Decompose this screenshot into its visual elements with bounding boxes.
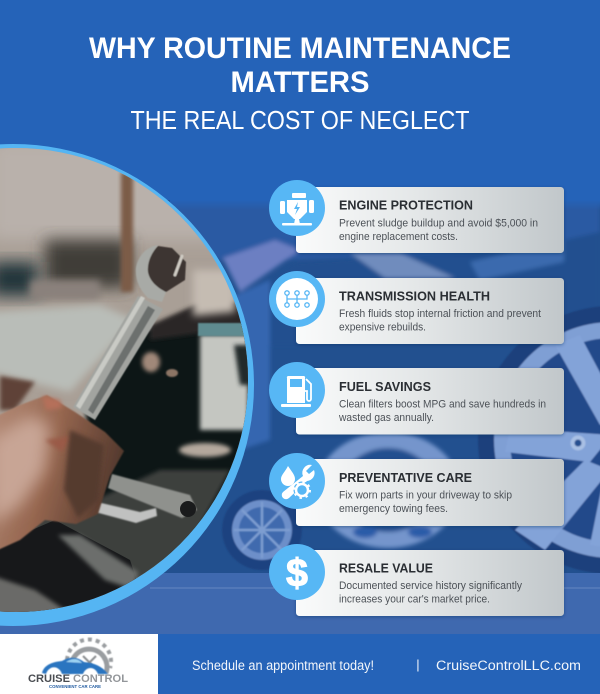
subtitle: THE REAL COST OF NEGLECT — [130, 105, 470, 135]
card: preventative care — [269, 453, 564, 526]
text: transmission health: Fresh fluids stop internal friction and prevent — [339, 308, 541, 320]
logo: car — [42, 658, 108, 674]
ground — [0, 573, 600, 634]
text: transmission health: expensive rebuilds. — [339, 322, 426, 334]
text: fuel savings: wasted gas annually. — [338, 412, 434, 424]
heading: preventative care: PREVENTATIVE CARE — [339, 470, 472, 485]
card: resale value — [269, 544, 564, 616]
text: preventative care: emergency towing fees. — [339, 503, 448, 515]
logo: gear — [67, 639, 111, 673]
wrench — [73, 245, 186, 420]
icon: dollar sign — [269, 544, 325, 600]
text: engine protection: engine replacement costs. — [339, 231, 458, 243]
text: resale value: Documented service history significantly — [339, 580, 522, 592]
text: engine protection — [339, 218, 538, 243]
footer: website: CruiseControlLLC.com — [436, 658, 581, 673]
icon: engine — [269, 180, 325, 236]
heading: resale value: RESALE VALUE — [339, 560, 433, 576]
circular mechanic photo — [0, 140, 260, 630]
text: fuel savings — [338, 398, 546, 424]
icon: fuel pump — [269, 362, 325, 418]
text: resale value — [339, 580, 522, 606]
heading: fuel savings: FUEL SAVINGS — [339, 379, 431, 394]
footer: call to action: Schedule an appointment today! — [192, 658, 374, 673]
logo: wordmark: CRUISE CONTROL — [28, 673, 128, 685]
card: fuel savings — [269, 362, 564, 434]
icon: drop, wrench and gear — [269, 453, 325, 509]
logo: tagline: CONVENIENT CAR CARE — [49, 684, 101, 689]
background photo: blue-tinted car — [0, 200, 600, 634]
text: transmission health — [339, 308, 541, 334]
heading: transmission health: TRANSMISSION HEALTH — [339, 288, 490, 304]
text: preventative care — [339, 490, 512, 515]
centre wheel — [324, 434, 452, 550]
text: resale value: increases your car's market price. — [339, 594, 490, 606]
title: WHY ROUTINE MAINTENANCE — [89, 32, 511, 65]
footer bar — [0, 634, 600, 694]
logo panel — [0, 634, 158, 694]
title: MATTERS — [230, 66, 370, 99]
card: transmission health — [269, 271, 564, 344]
right car wheel — [478, 306, 600, 574]
title — [89, 32, 511, 99]
text: fuel savings: Clean filters boost MPG and save hundreds in — [339, 398, 546, 410]
card: engine protection — [269, 180, 564, 253]
hand — [0, 395, 124, 558]
footer: divider: | — [416, 657, 420, 672]
icon: gear shifter — [269, 271, 325, 327]
text: preventative care: Fix worn parts in your driveway to skip — [339, 490, 512, 502]
text: engine protection: Prevent sludge buildup and avoid $5,000 in — [339, 218, 538, 230]
heading: engine protection: ENGINE PROTECTION — [339, 198, 473, 212]
left car wheel — [222, 490, 302, 570]
icon: dollar sign: $ — [286, 552, 308, 595]
